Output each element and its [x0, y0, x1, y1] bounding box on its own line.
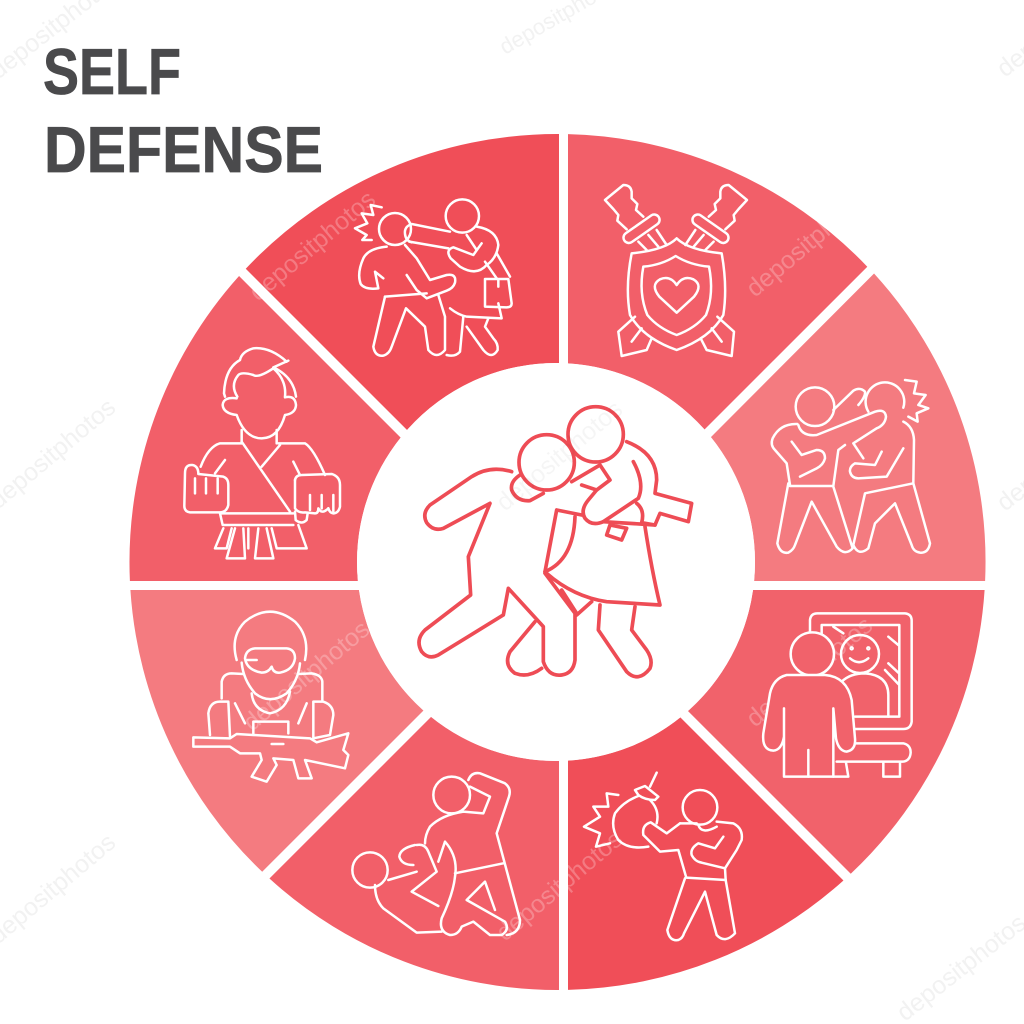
segment: top right	[568, 134, 867, 430]
watermarks on ring: depositphotos	[238, 615, 375, 737]
watermarks on ring	[238, 181, 878, 947]
segment: top left	[246, 134, 559, 430]
segment: right upper	[711, 273, 986, 581]
watermarks on ring: depositphotos	[741, 181, 878, 303]
watermarks on ring: depositphotos	[244, 185, 381, 307]
segment: left upper	[129, 276, 401, 581]
icon: man punching bag	[584, 773, 742, 940]
watermarks on ring: depositphotos	[741, 611, 878, 733]
icon: grappling on the ground	[352, 773, 520, 935]
icon: crossed swords and heart shield	[605, 185, 747, 356]
title	[43, 35, 323, 186]
segmented ring	[129, 134, 986, 990]
icon: attacker hit by woman with bag	[355, 199, 512, 356]
icon: person at mirror	[763, 613, 912, 777]
watermarks on ring: depositphotos	[491, 825, 628, 947]
segment: bottom left	[269, 717, 559, 990]
segment: right lower	[688, 590, 985, 874]
segment: left lower	[130, 590, 424, 872]
segment: bottom right	[568, 717, 843, 990]
title: SELF	[43, 35, 181, 108]
icon: karate fighter	[184, 348, 340, 558]
inner circle	[357, 363, 755, 761]
icon: two people fighting	[772, 380, 930, 553]
icon: soldier with rifle	[193, 612, 348, 782]
title: DEFENSE	[44, 113, 323, 186]
watermark over centre icon: depositphotos	[491, 395, 628, 517]
icon: woman defending against attacker	[419, 407, 692, 677]
